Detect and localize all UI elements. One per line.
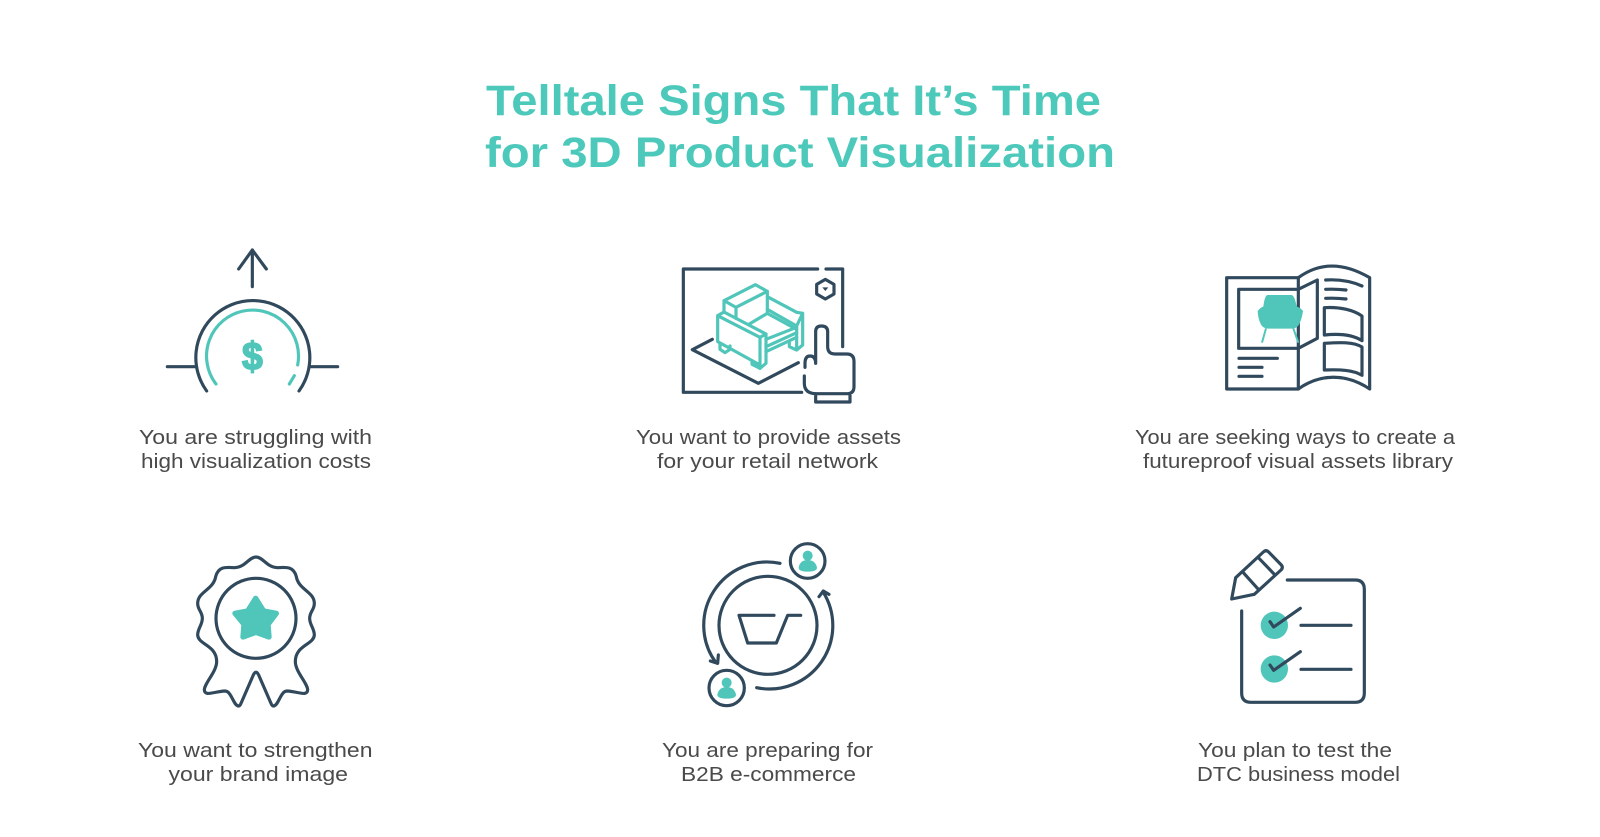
caption: DTC business model [1197,763,1400,786]
icon: rising cost gauge [167,250,338,391]
caption: You are preparing for [662,739,873,762]
panel: visual assets library [1135,266,1456,473]
screen frame [683,269,843,392]
caption [662,739,873,786]
caption [1197,739,1400,786]
customer bottom [709,670,744,706]
caption [138,739,372,786]
caption: You are struggling with [139,426,372,449]
caption [139,426,372,473]
title: for 3D Product Visualization [485,129,1115,177]
caption: for your retail network [657,450,879,473]
chair [1258,295,1303,329]
pointing hand [804,326,854,402]
title: Telltale Signs That It’s Time [486,77,1101,125]
panel: brand image [138,557,372,786]
panel: DTC business model [1197,551,1400,786]
title [485,77,1115,177]
icon: armchair on touch screen [683,269,854,402]
caption: You want to strengthen [138,739,372,762]
panel: visualization costs [139,250,372,473]
panel: retail network assets [636,269,901,473]
icon: checklist with pencil [1232,551,1364,702]
armchair [718,285,803,368]
caption: You are seeking ways to create a [1135,426,1456,449]
caption: high visualization costs [141,450,371,473]
floor plane [692,339,798,383]
customer top [790,544,825,578]
caption: You want to provide assets [636,426,901,449]
caption: B2B e-commerce [681,763,856,786]
caption [636,426,901,473]
3D cube badge [817,279,834,299]
icon: rising cost gauge: $ [242,335,263,379]
caption [1135,426,1456,473]
icon: open catalog with chair [1227,266,1370,389]
caption: your brand image [168,763,348,786]
caption: futureproof visual assets library [1143,450,1454,473]
panel: B2B e-commerce [662,544,873,786]
caption: You plan to test the [1198,739,1392,762]
icon: rosette with star [198,557,314,706]
icon: cart cycle with customers [704,544,833,706]
